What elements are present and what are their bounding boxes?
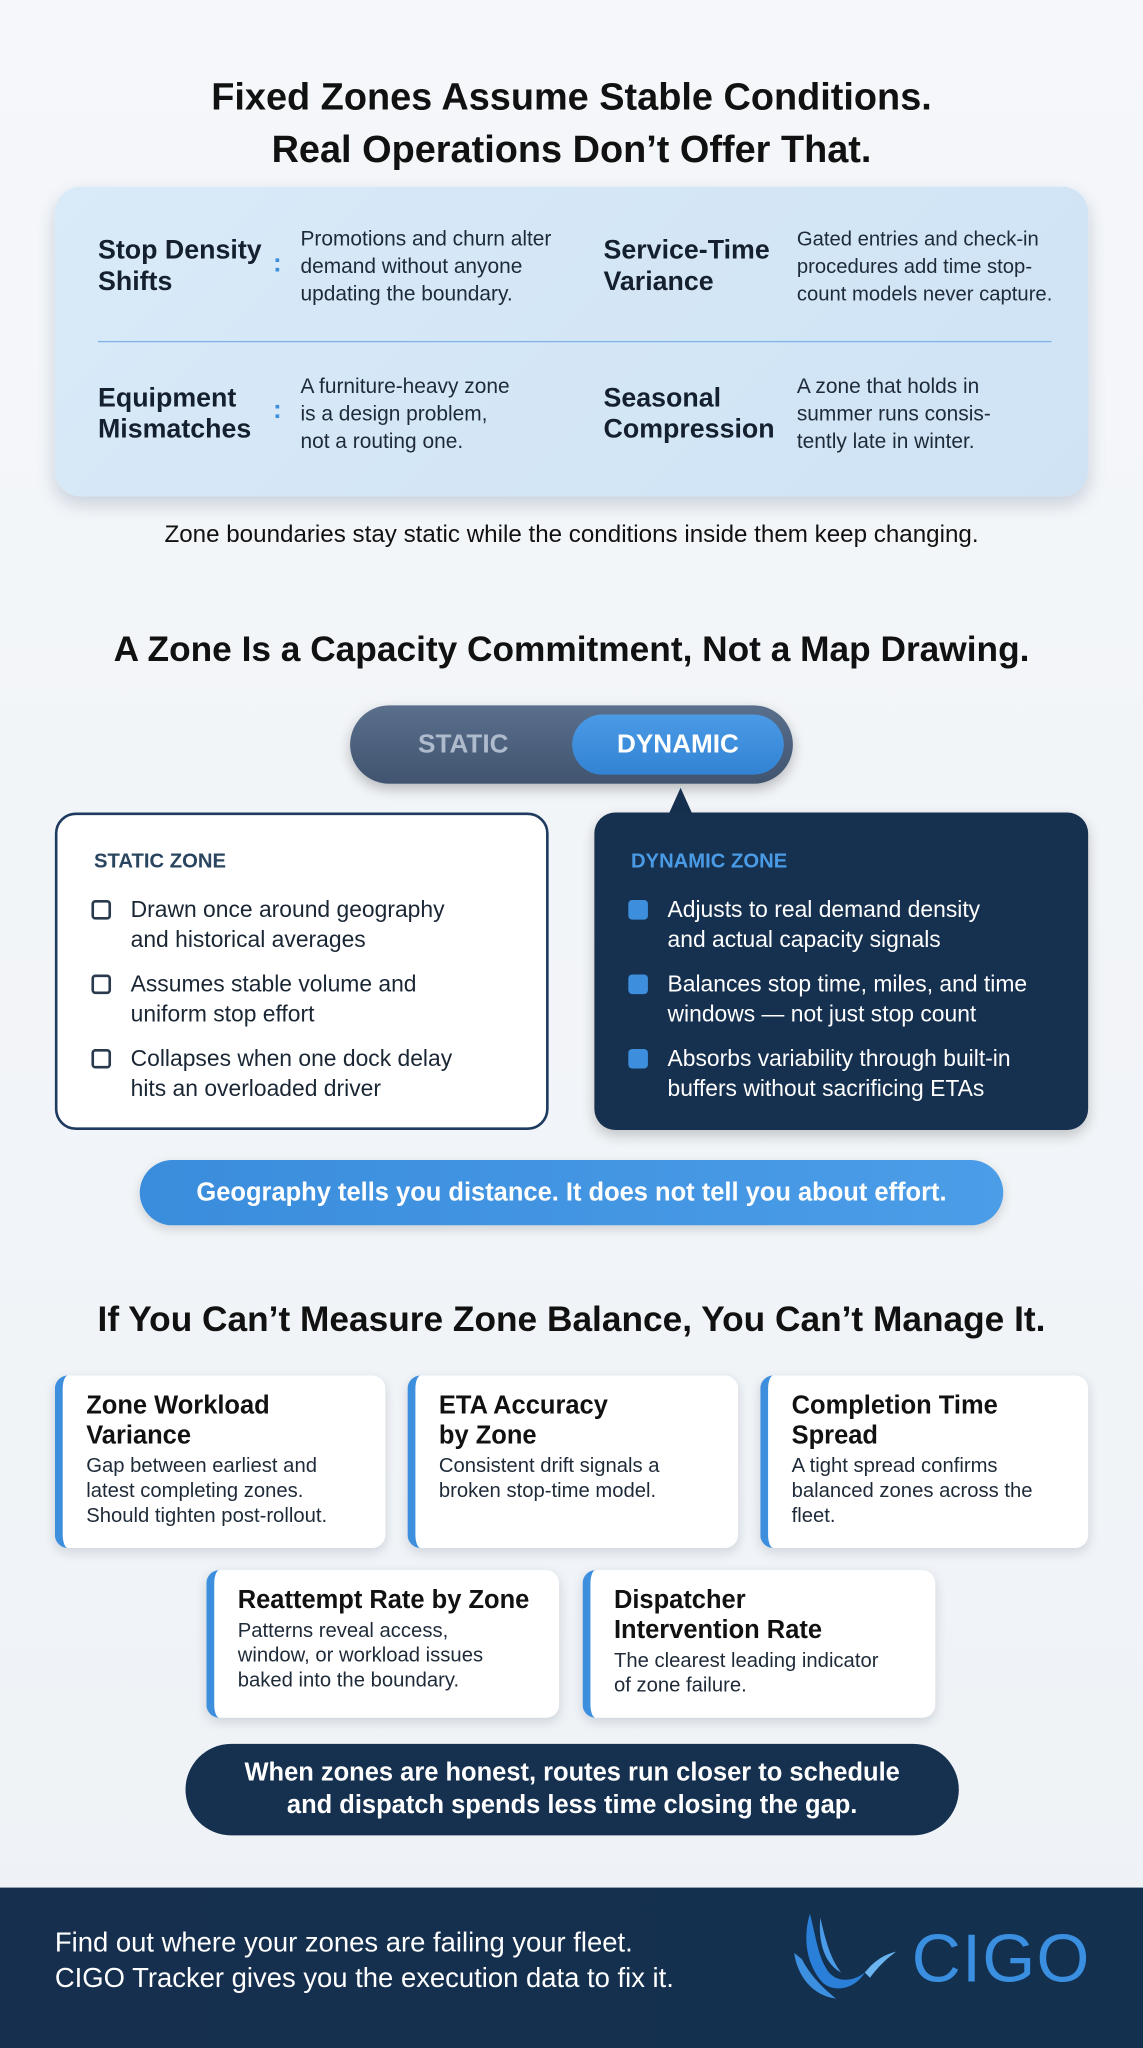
desc: seasonal: summer runs consis- xyxy=(797,404,991,426)
item xyxy=(628,1045,1011,1101)
item: Assumes stable volume and xyxy=(131,971,417,997)
item: and historical averages xyxy=(131,926,366,952)
desc: stop density: Promotions and churn alter xyxy=(300,229,551,251)
desc: equipment: A furniture-heavy zone xyxy=(300,376,510,398)
metric: eta accuracy xyxy=(408,1376,738,1548)
metric: completion time spread: fleet. xyxy=(792,1505,836,1527)
item xyxy=(628,971,1027,1027)
item: Drawn once around geography xyxy=(131,896,445,922)
desc: stop density: updating the boundary. xyxy=(300,283,513,306)
dark callout: and dispatch spends less time closing the gap. xyxy=(287,1791,857,1820)
item xyxy=(628,896,980,952)
item: windows — not just stop count xyxy=(668,1001,976,1027)
heading: measure: If You Can’t Measure Zone Balance, You Can’t Manage It. xyxy=(98,1300,1045,1339)
metric: workload variance: latest completing zones. xyxy=(86,1480,303,1502)
label: stop density shifts: Shifts xyxy=(98,266,172,297)
label: stop density shifts xyxy=(98,235,262,297)
toggle pill: dynamic xyxy=(572,715,784,775)
label: service-time variance: Variance xyxy=(604,266,714,297)
metric: reattempt rate: baked into the boundary. xyxy=(238,1669,459,1692)
desc: seasonal: tently late in winter. xyxy=(797,431,975,453)
heading: static zone: STATIC ZONE xyxy=(94,850,226,873)
toggle pill: dynamic: DYNAMIC xyxy=(617,730,739,759)
footer xyxy=(0,1888,1143,2048)
desc: equipment: is a design problem, xyxy=(300,404,487,426)
label: equipment mismatches: Mismatches xyxy=(98,414,251,444)
metric: eta accuracy: by Zone xyxy=(439,1421,537,1450)
logo xyxy=(794,1914,1091,1999)
icon: bird xyxy=(794,1914,896,1999)
desc: seasonal: A zone that holds in xyxy=(797,376,979,398)
title: Fixed Zones Assume Stable Conditions. xyxy=(211,77,932,119)
metric: dispatcher intervention: Dispatcher xyxy=(614,1586,746,1615)
caption: Zone boundaries stay static while the conditions inside them keep changing. xyxy=(164,520,979,547)
heading: dynamic zone: DYNAMIC ZONE xyxy=(631,850,787,873)
item: Adjusts to real demand density xyxy=(668,896,980,922)
item xyxy=(91,971,417,1027)
panel: condition shifts xyxy=(55,187,1088,496)
label: seasonal compression: Compression xyxy=(604,414,775,444)
item: hits an overloaded driver xyxy=(131,1075,381,1101)
panel: condition shifts: : xyxy=(273,250,282,278)
banner: geography xyxy=(140,1160,1003,1225)
metric: completion time spread: A tight spread confirms xyxy=(792,1455,998,1477)
item: and actual capacity signals xyxy=(668,926,941,952)
item: Absorbs variability through built-in xyxy=(668,1045,1011,1071)
card: dynamic zone xyxy=(594,813,1088,1130)
metric: dispatcher intervention: of zone failure. xyxy=(614,1675,747,1697)
toggle xyxy=(350,705,793,784)
desc: seasonal xyxy=(797,376,991,453)
card: static zone xyxy=(55,813,549,1130)
panel: condition shifts: : xyxy=(273,396,282,425)
desc: service-time: procedures add time stop- xyxy=(797,256,1032,278)
banner: geography: Geography tells you distance. It does not tell you about effort. xyxy=(196,1178,947,1207)
metric: reattempt rate: window, or workload issues xyxy=(238,1645,483,1667)
pointer xyxy=(669,788,692,814)
item xyxy=(91,896,445,952)
toggle label: static: STATIC xyxy=(418,730,508,759)
desc: stop density: demand without anyone xyxy=(300,256,522,278)
metric: workload variance: Should tighten post-rollout. xyxy=(86,1505,327,1527)
item: buffers without sacrificing ETAs xyxy=(668,1075,984,1101)
label: equipment mismatches: Equipment xyxy=(98,383,236,413)
logo text: CIGO xyxy=(912,1922,1091,1997)
metric: completion time spread: Completion Time xyxy=(792,1391,998,1420)
metric: completion time spread: balanced zones across the xyxy=(792,1480,1032,1502)
heading: capacity commitment: A Zone Is a Capacity Commitment, Not a Map Drawing. xyxy=(114,630,1029,669)
label: equipment mismatches xyxy=(98,383,251,444)
desc: equipment: not a routing one. xyxy=(300,431,463,453)
dark callout: When zones are honest, routes run closer to schedule xyxy=(244,1758,900,1787)
desc: service-time: Gated entries and check-in xyxy=(797,229,1039,251)
metric: dispatcher intervention: The clearest leading indicator xyxy=(614,1650,878,1672)
metric: eta accuracy: Consistent drift signals a xyxy=(439,1455,659,1477)
metric: workload variance: Gap between earliest and xyxy=(86,1455,317,1477)
metric: completion time spread xyxy=(760,1376,1088,1548)
metric: workload variance: Variance xyxy=(86,1421,191,1450)
label: seasonal compression: Seasonal xyxy=(604,383,721,413)
label: seasonal compression xyxy=(604,383,775,444)
desc: service-time: count models never capture. xyxy=(797,283,1052,306)
metric: reattempt rate: Reattempt Rate by Zone xyxy=(238,1586,529,1615)
item: uniform stop effort xyxy=(131,1001,314,1027)
desc: stop density xyxy=(300,229,551,306)
footer text: CIGO Tracker gives you the execution data to fix it. xyxy=(55,1963,674,1993)
metric: workload variance: Zone Workload xyxy=(86,1391,270,1420)
item xyxy=(91,1045,452,1101)
label: service-time variance: Service-Time xyxy=(604,235,770,265)
desc: equipment xyxy=(300,376,510,453)
metric: dispatcher intervention: Intervention Rate xyxy=(614,1616,822,1645)
metric: reattempt rate: Patterns reveal access, xyxy=(238,1620,448,1642)
item: Balances stop time, miles, and time xyxy=(668,971,1027,997)
metric: reattempt rate xyxy=(206,1570,559,1718)
metric: dispatcher intervention xyxy=(583,1570,935,1718)
metric: eta accuracy: broken stop-time model. xyxy=(439,1480,656,1502)
item: Collapses when one dock delay xyxy=(131,1045,452,1071)
label: stop density shifts: Stop Density xyxy=(98,235,262,265)
footer text: Find out where your zones are failing your fleet. xyxy=(55,1928,633,1958)
title: Real Operations Don’t Offer That. xyxy=(272,129,871,171)
metric: workload variance xyxy=(55,1376,385,1548)
footer text xyxy=(55,1928,674,1993)
dark callout xyxy=(185,1744,959,1835)
metric: eta accuracy: ETA Accuracy xyxy=(439,1391,608,1420)
title xyxy=(211,77,932,171)
label: service-time variance xyxy=(604,235,770,297)
metric: completion time spread: Spread xyxy=(792,1421,878,1450)
desc: service-time xyxy=(797,229,1052,306)
